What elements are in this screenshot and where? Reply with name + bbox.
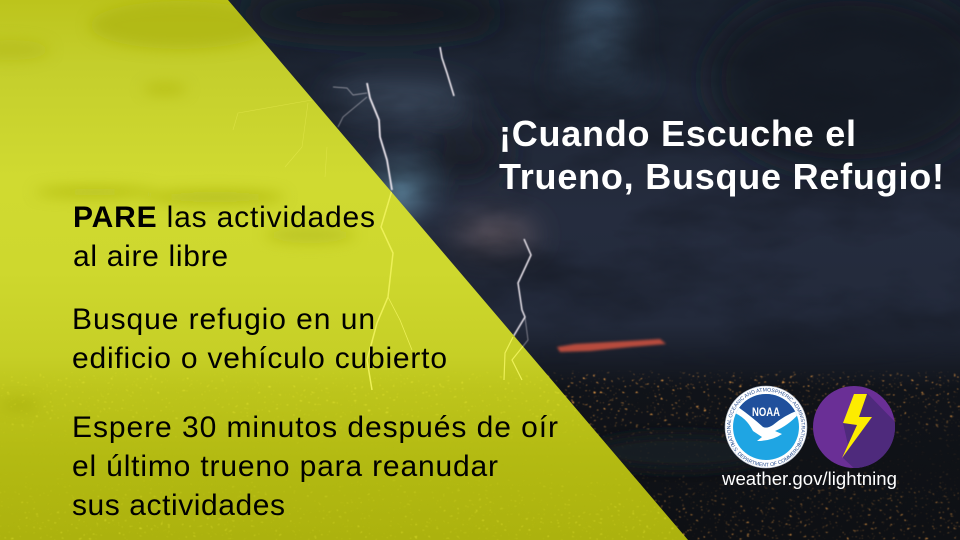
lightning bolts xyxy=(333,47,531,380)
instruction: seek shelter: edificio o vehículo cubierto xyxy=(72,342,447,375)
url label: weather.gov/lightning xyxy=(721,468,897,489)
city lights seen through panel xyxy=(2,374,684,540)
instruction: stop outdoor activities xyxy=(73,201,375,273)
instruction: wait 30 minutes: Espere 30 minutos después de oír xyxy=(72,411,558,444)
lightning seen through panel xyxy=(233,100,528,390)
yellow triangle panel xyxy=(0,0,700,540)
background photo: storm sky over night city xyxy=(246,0,960,540)
icon: NOAA seal: NATIONAL OCEANIC AND ATMOSPHERIC ADMINISTRATION xyxy=(726,388,806,446)
instruction: wait 30 minutes: sus actividades xyxy=(72,489,285,522)
icon: NOAA seal xyxy=(724,386,808,468)
instruction: seek shelter: Busque refugio en un xyxy=(72,303,375,336)
heading: ¡Cuando Escuche el xyxy=(499,113,856,154)
city lights xyxy=(547,370,960,540)
heading xyxy=(499,113,944,197)
icon: purple lightning badge xyxy=(813,386,895,468)
instruction: stop outdoor activities: al aire libre xyxy=(73,240,228,273)
red horizon glow xyxy=(557,339,666,352)
heading: Trueno, Busque Refugio! xyxy=(499,156,944,197)
icon: NOAA seal: U.S. DEPARTMENT OF COMMERCE xyxy=(731,442,802,466)
instruction: stop outdoor activities: PARE las actividades xyxy=(73,201,375,234)
instruction: wait 30 minutes: el último trueno para reanudar xyxy=(72,450,498,483)
icon: NOAA seal: NOAA xyxy=(752,405,780,419)
river and dark land xyxy=(590,434,770,470)
instruction: wait 30 minutes xyxy=(72,411,558,522)
instruction: seek shelter xyxy=(72,303,447,375)
